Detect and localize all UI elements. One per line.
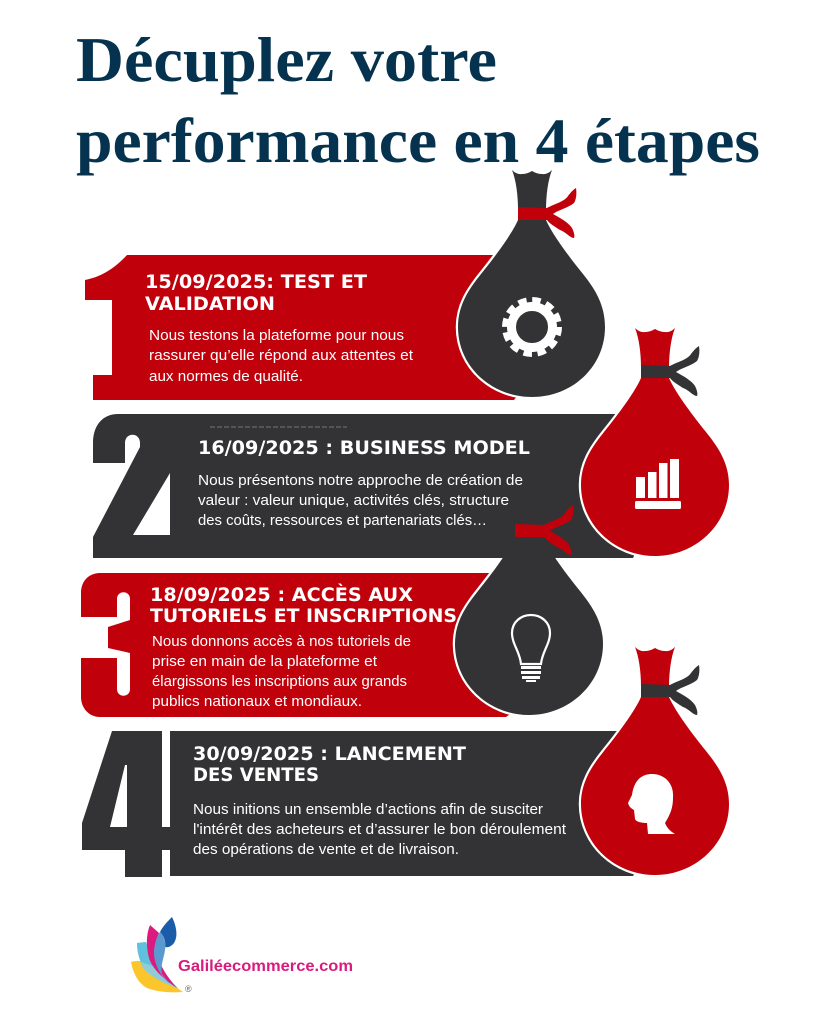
title: Décuplez votre (76, 25, 497, 95)
step 3 text (150, 584, 457, 710)
logo: Galiléecommerce.com (178, 958, 353, 975)
step 2 text: des coûts, ressources et partenariats clés… (198, 512, 487, 529)
icon: bars (635, 459, 681, 509)
band 4 (170, 731, 650, 876)
icon: bulb (512, 615, 550, 682)
faint ghost text strip (210, 426, 347, 428)
band 3 with numeral 3 (81, 573, 530, 717)
step 4 text: l'intérêt des acheteurs et d’assurer le bon déroulement (193, 821, 567, 838)
step 3 text: 18/09/2025 : ACCÈS AUX (150, 584, 413, 606)
icon: logo petals (131, 917, 183, 992)
step 1 text: 15/09/2025: TEST ET (145, 272, 367, 293)
title: performance en 4 étapes (76, 106, 760, 176)
title (76, 25, 760, 176)
step 1 text: rassurer qu’elle répond aux attentes et (149, 347, 414, 364)
bag 3: light bulb (455, 487, 603, 715)
step 4 text: Nous initions un ensemble d’actions afin de susciter (193, 801, 543, 818)
icon: gear (505, 300, 559, 354)
numeral 4 (82, 731, 172, 877)
step 3 text: Nous donnons accès à nos tutoriels de (152, 633, 411, 650)
step 1 text: Nous testons la plateforme pour nous (149, 327, 404, 344)
step 4 text: DES VENTES (193, 765, 319, 786)
step 4 text: 30/09/2025 : LANCEMENT (193, 744, 466, 765)
bag 1: gear (458, 170, 605, 397)
step 4 text (193, 744, 567, 858)
step 3 text: prise en main de la plateforme et (152, 653, 378, 670)
step 2 text: valeur : valeur unique, activités clés, structure (198, 492, 509, 509)
bag 2: bar chart (581, 328, 729, 556)
band 1 with numeral 1 (85, 255, 530, 400)
step 4 text: des opérations de vente et de livraison. (193, 841, 459, 858)
band 2 with numeral 2 (93, 414, 650, 558)
step 3 text: élargissons les inscriptions aux grands (152, 673, 407, 690)
step 1 text: aux normes de qualité. (149, 368, 303, 385)
icon: head (628, 774, 675, 834)
step 2 text (198, 438, 530, 529)
logo (131, 917, 353, 994)
bag 4: head (581, 647, 729, 875)
step 2 text: Nous présentons notre approche de création de (198, 472, 523, 489)
step 1 text (145, 272, 414, 385)
step 3 text: publics nationaux et mondiaux. (152, 693, 362, 710)
step 3 text: TUTORIELS ET INSCRIPTIONS (150, 606, 457, 627)
step 1 text: VALIDATION (145, 294, 275, 315)
logo: ® (185, 984, 192, 994)
step 2 text: 16/09/2025 : BUSINESS MODEL (198, 438, 530, 459)
